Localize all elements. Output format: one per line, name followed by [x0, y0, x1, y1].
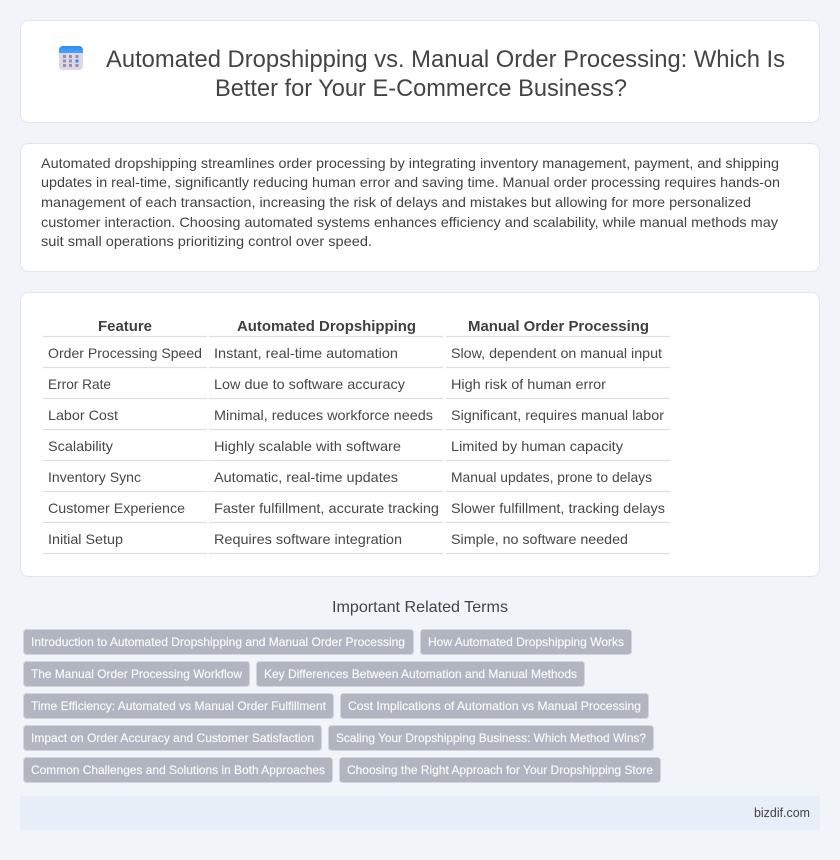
row: scalability: Highly scalable with software	[214, 438, 401, 454]
footer	[20, 796, 820, 830]
chip: Common Challenges and Solutions in Both Approaches	[31, 763, 325, 777]
chip	[340, 694, 648, 718]
row: initial setup: Initial Setup	[48, 531, 123, 547]
panel: related term chips	[24, 630, 660, 782]
text block: intro paragraph: Automated dropshipping streamlines order processing by integrating inventory management, payment, and shipping	[41, 155, 779, 171]
panel: title header	[20, 20, 820, 122]
chip: Impact on Order Accuracy and Customer Satisfaction	[31, 731, 314, 745]
title: Automated Dropshipping vs. Manual Order Processing: Which Is	[106, 46, 785, 73]
row: inventory sync: Automatic, real-time updates	[214, 469, 398, 485]
title: Better for Your E-Commerce Business?	[215, 75, 627, 102]
title	[106, 46, 785, 102]
chip: Time Efficiency: Automated vs Manual Order Fulfillment	[31, 699, 327, 713]
row: order processing speed: Instant, real-time automation	[214, 345, 398, 361]
row: error rate: Error Rate	[48, 376, 111, 392]
chip	[24, 630, 414, 654]
heading: important related terms: Important Related Terms	[332, 599, 508, 616]
text block: intro paragraph: suit small operations prioritizing control over speed.	[41, 233, 372, 249]
row: scalability: Scalability	[48, 438, 113, 454]
row: labor cost	[48, 407, 664, 423]
chip: The Manual Order Processing Workflow	[31, 667, 242, 681]
chip	[256, 662, 584, 686]
row: inventory sync: Inventory Sync	[48, 469, 141, 485]
row: labor cost: Significant, requires manual labor	[451, 407, 664, 423]
panel: comparison table	[20, 292, 820, 576]
row: customer experience: Faster fulfillment, accurate tracking	[214, 500, 439, 516]
chip: Scaling Your Dropshipping Business: Which Method Wins?	[336, 731, 646, 745]
chip	[340, 758, 660, 782]
row: customer experience: Customer Experience	[48, 500, 185, 516]
table header row: Automated Dropshipping	[237, 318, 416, 335]
text block: intro paragraph: customer interaction. Choosing automated systems enhances efficiency and scalability, while manual methods may	[41, 214, 778, 230]
table header row: Feature	[98, 318, 152, 335]
row: error rate: Low due to software accuracy	[214, 376, 405, 392]
chip	[420, 630, 632, 654]
footer: bizdif.com	[754, 805, 810, 820]
chip: Key Differences Between Automation and Manual Methods	[264, 667, 577, 681]
row: inventory sync: Manual updates, prone to delays	[451, 469, 652, 485]
row: customer experience: Slower fulfillment, tracking delays	[451, 500, 665, 516]
chip	[24, 726, 322, 750]
row: initial setup: Simple, no software needed	[451, 531, 628, 547]
icon: calendar grid	[59, 46, 83, 70]
table header row: Manual Order Processing	[468, 318, 649, 335]
row: error rate: High risk of human error	[451, 376, 606, 392]
row: customer experience	[48, 500, 665, 516]
chip	[24, 694, 334, 718]
row: initial setup: Requires software integration	[214, 531, 402, 547]
row: order processing speed: Slow, dependent on manual input	[451, 345, 662, 361]
row: order processing speed: Order Processing Speed	[48, 345, 202, 361]
chip	[24, 758, 332, 782]
table header row	[98, 318, 649, 335]
row: inventory sync	[48, 469, 652, 485]
row: scalability	[48, 438, 623, 454]
chip: Choosing the Right Approach for Your Dropshipping Store	[347, 763, 653, 777]
row: initial setup	[48, 531, 628, 547]
chip: How Automated Dropshipping Works	[428, 635, 624, 649]
chip	[328, 726, 654, 750]
row: labor cost: Minimal, reduces workforce needs	[214, 407, 433, 423]
text block: intro paragraph	[41, 155, 780, 249]
row: error rate	[48, 376, 606, 392]
row: order processing speed	[48, 345, 662, 361]
row: scalability: Limited by human capacity	[451, 438, 623, 454]
panel: introduction text	[20, 144, 820, 272]
text block: intro paragraph: updates in real-time, significantly reducing human error and saving time. Manual order processing requires hands-on	[41, 174, 780, 190]
text block: intro paragraph: management of each transaction, increasing the risk of delays and mistakes but allowing for more personalized	[41, 194, 751, 210]
chip: Introduction to Automated Dropshipping and Manual Order Processing	[31, 635, 405, 649]
chip: Cost Implications of Automation vs Manual Processing	[348, 699, 641, 713]
row: labor cost: Labor Cost	[48, 407, 118, 423]
chip	[24, 662, 250, 686]
